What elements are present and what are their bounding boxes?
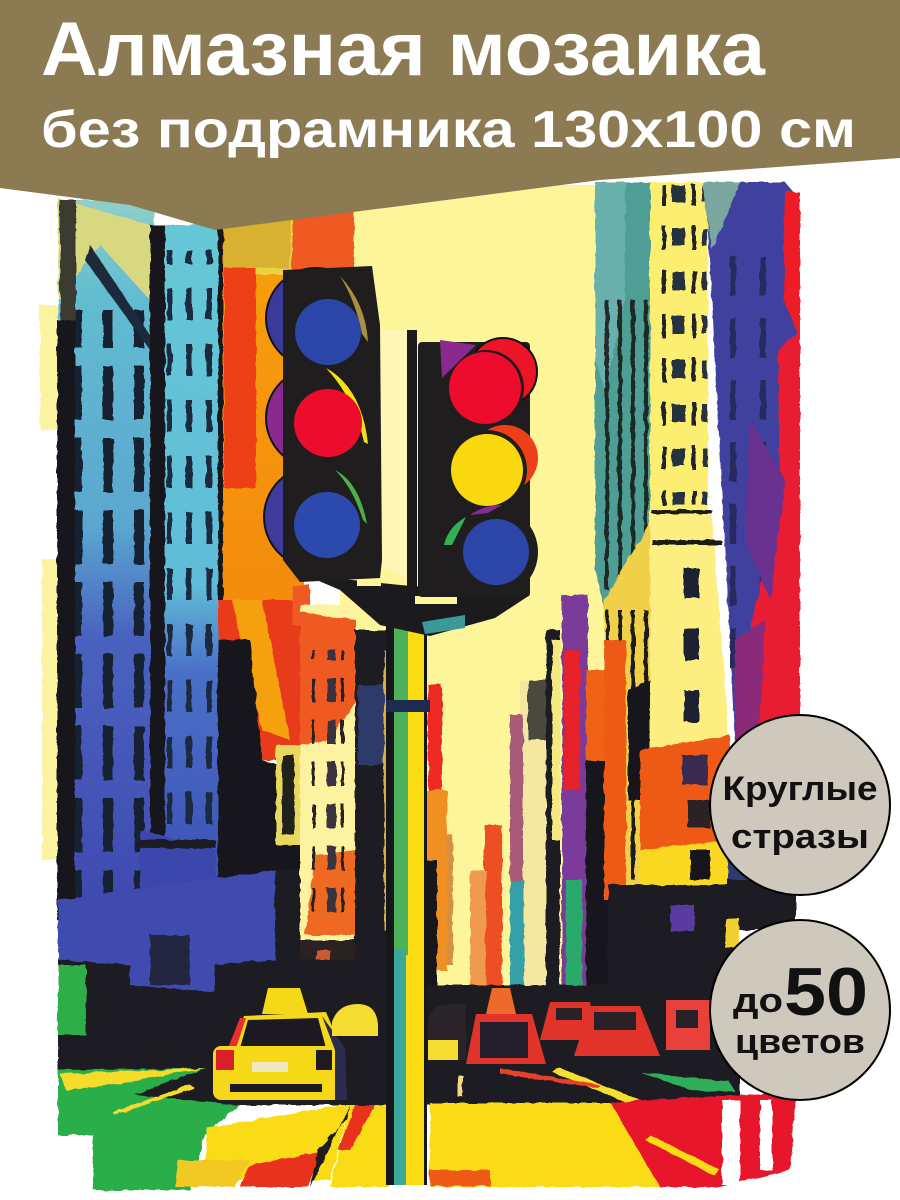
left teal building [136, 225, 220, 945]
title: Алмазная мозаика [41, 7, 766, 92]
traffic light: right head [418, 338, 538, 598]
right blue building [702, 182, 800, 745]
dark central buildings behind pole [355, 630, 395, 1010]
right striped skyscraper [595, 182, 655, 900]
badge: round rhinestones: стразы [731, 818, 869, 856]
badge: up to 50 colours: до [733, 982, 783, 1020]
badge: round rhinestones: Круглые [722, 770, 878, 808]
road [58, 1068, 796, 1190]
traffic light: mount [305, 575, 530, 636]
orange building [218, 212, 354, 970]
badge: round rhinestones [710, 715, 890, 895]
taxi [213, 988, 347, 1100]
left blue building [57, 198, 154, 980]
cream building [300, 605, 356, 1010]
buildings [57, 182, 800, 1190]
traffic light: left head [264, 266, 417, 590]
lower blue walls [58, 870, 275, 992]
badge: up to 50 colours: 50 [784, 954, 868, 1030]
badge: up to 50 colours [710, 920, 890, 1100]
distant cars [332, 988, 710, 1064]
painting: city street [40, 182, 800, 1190]
sky [340, 185, 605, 1015]
storefront and street dark area [608, 885, 736, 1010]
header banner [0, 0, 900, 230]
subtitle: без подрамника 130x100 см [41, 101, 856, 159]
distant towers [425, 595, 610, 1025]
traffic light pole [386, 600, 430, 1185]
right yellow skyscraper [640, 182, 735, 885]
left paper flecks [40, 305, 60, 860]
badge: up to 50 colours: цветов [735, 1023, 865, 1061]
